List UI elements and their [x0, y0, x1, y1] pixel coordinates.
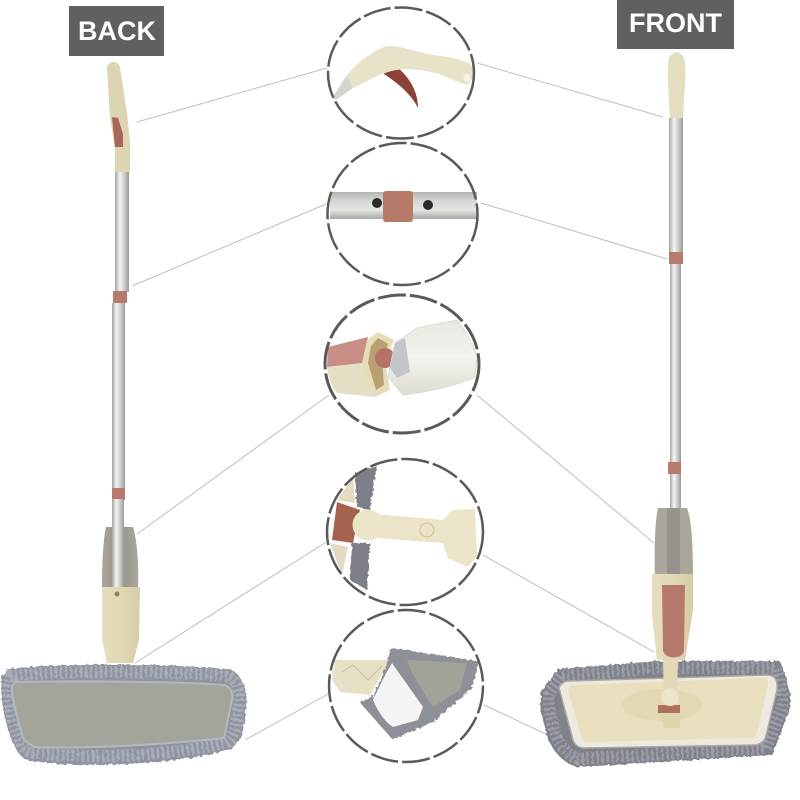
circle border: [328, 143, 478, 285]
plate underside: [332, 660, 390, 695]
joint arm: [375, 509, 477, 567]
detail circle: swivel joint: [327, 459, 483, 605]
back handle grip: [107, 62, 130, 173]
circle border: [327, 459, 483, 605]
detail circle: mop pad: [329, 610, 483, 762]
back water tank: [102, 527, 138, 588]
label: back: BACK: [78, 16, 156, 46]
front lower tube: [670, 264, 681, 463]
front view mop: [543, 52, 787, 764]
front pink strip: [662, 585, 685, 658]
translucent bottle: [388, 320, 477, 395]
front upper tube: [669, 118, 683, 253]
back lower band: [112, 488, 125, 500]
back lower tube: [112, 303, 125, 489]
back upper tube: [115, 172, 129, 292]
back mop pad microfibre: [12, 681, 232, 747]
detail circle: spray nozzle: [325, 295, 479, 433]
circle border: [325, 295, 479, 433]
lock band: [383, 191, 413, 222]
pad microfibre: [407, 660, 467, 707]
front mop pad edge: [559, 675, 777, 748]
pad fringe: [363, 650, 477, 737]
label: front: [617, 0, 734, 49]
label: front: FRONT: [629, 8, 722, 38]
back cream body: [102, 587, 140, 663]
detail circle: handle grip: [328, 8, 474, 138]
label: back: [69, 6, 164, 56]
leader lines: [132, 63, 667, 740]
front water tank: [655, 508, 693, 582]
front cream body: [652, 574, 693, 660]
front upper band: [669, 252, 683, 264]
front neck and joint: [663, 658, 678, 695]
circle border: [329, 610, 483, 762]
front handle grip: [668, 52, 685, 118]
back mop pad fringe: [4, 667, 244, 762]
front lower band: [668, 462, 681, 474]
front mop plate: [568, 678, 768, 742]
pad white backing: [373, 663, 423, 727]
back tube over tank: [112, 499, 124, 590]
detail circle: height lock: [328, 143, 478, 285]
back upper band: [113, 291, 127, 303]
circle border: [328, 8, 474, 138]
front mop fringe: [543, 664, 787, 764]
back view mop: [4, 62, 244, 762]
